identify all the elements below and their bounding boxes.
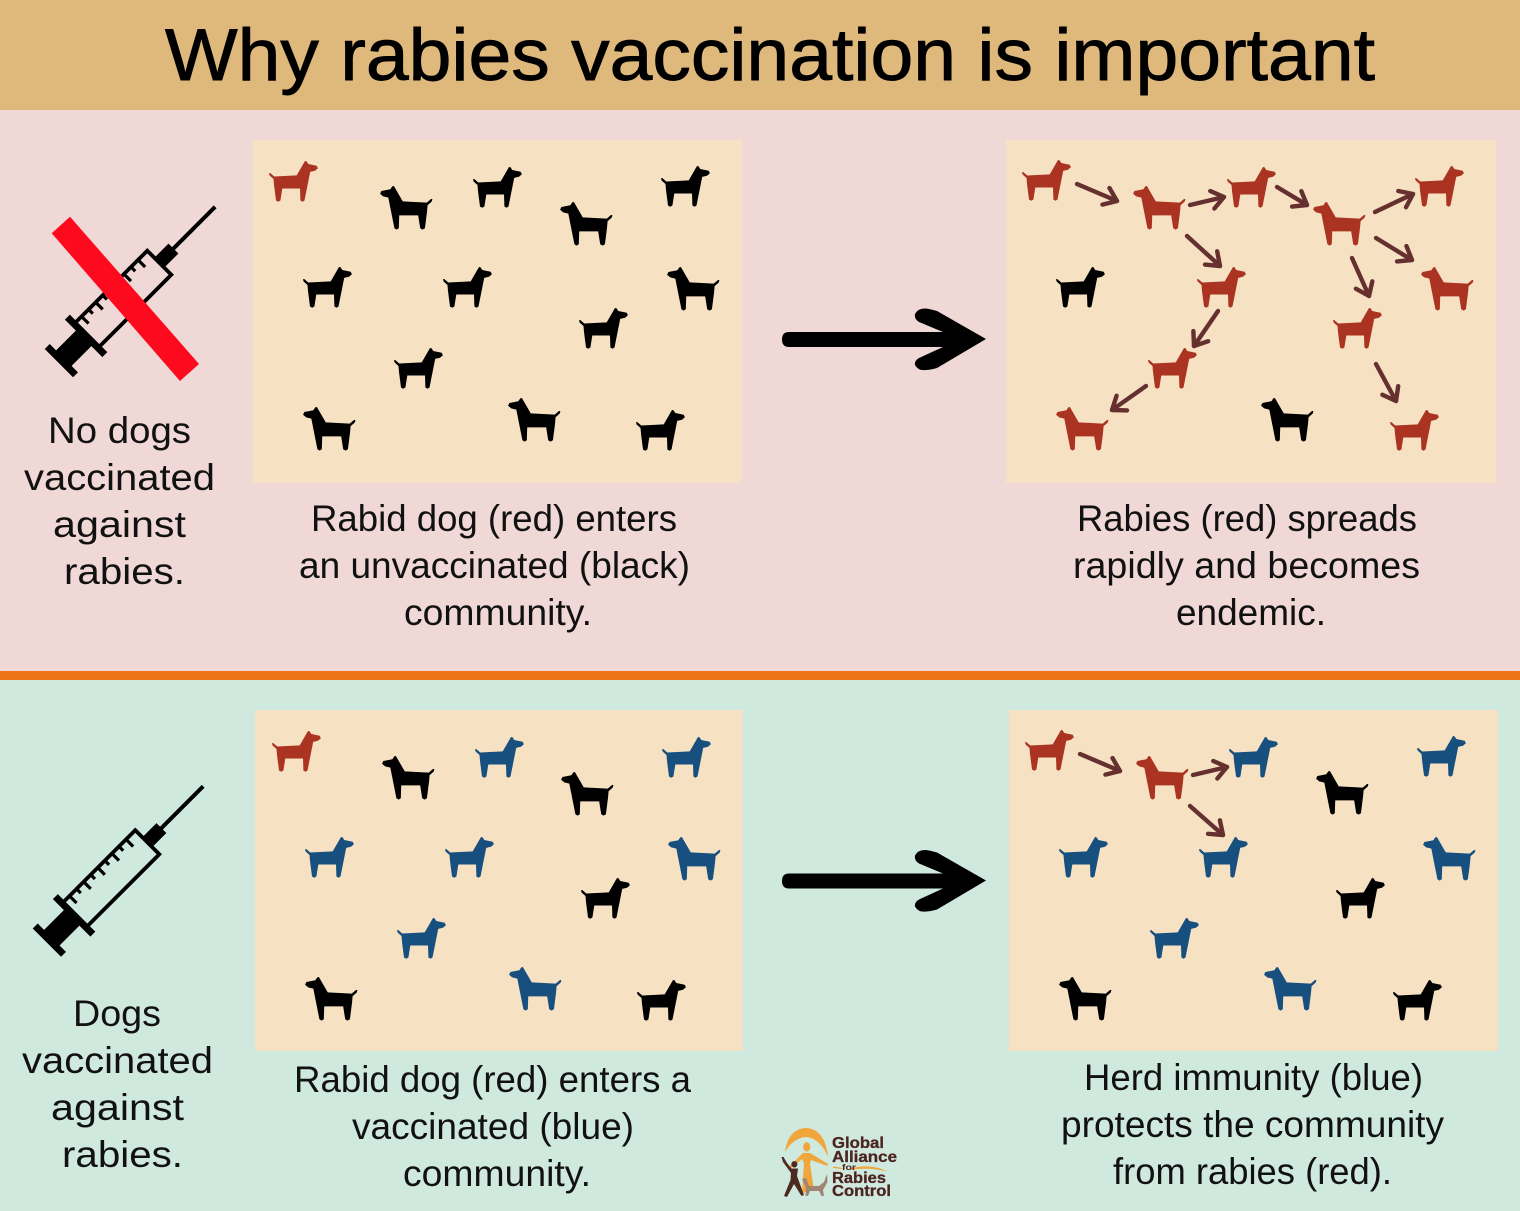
- panel: vaccination: [0, 680, 1520, 1211]
- unvaccinated dogs: [1059, 771, 1442, 1021]
- caption: rabid dog enters unvaccinated community: community.: [404, 592, 592, 633]
- infected dogs: [1022, 160, 1473, 451]
- logo crescent: [785, 1128, 828, 1157]
- label: dogs vaccinated: [22, 993, 213, 1175]
- scene: rabid dog enters vaccinated community: [255, 710, 743, 1051]
- logo text: [832, 1135, 897, 1200]
- label: dogs vaccinated: Dogs: [73, 993, 161, 1034]
- caption: rabid dog enters vaccinated community: community.: [403, 1153, 591, 1194]
- logo text: for: [842, 1163, 856, 1172]
- label: no dogs vaccinated: rabies.: [64, 551, 185, 592]
- infected dogs: [1025, 730, 1188, 800]
- caption: rabies spreads: rapidly and becomes: [1073, 545, 1420, 586]
- caption: rabies spreads: [1073, 498, 1420, 633]
- uninfected dogs: [1056, 267, 1313, 442]
- logo text: Alliance: [832, 1149, 897, 1166]
- panel: no vaccination: [0, 110, 1520, 671]
- rabid dog: [269, 161, 318, 202]
- caption: rabid dog enters unvaccinated community: an unvaccinated (black): [299, 545, 690, 586]
- unvaccinated dogs: [303, 166, 719, 451]
- vaccinated dogs: [305, 737, 720, 1011]
- caption: rabid dog enters unvaccinated community: Rabid dog (red) enters: [311, 498, 677, 539]
- logo text: Global: [832, 1135, 884, 1152]
- label: dogs vaccinated: rabies.: [62, 1134, 183, 1175]
- arrow: leads to herd immunity: [782, 850, 986, 912]
- label: no dogs vaccinated: [24, 410, 215, 592]
- label: dogs vaccinated: against: [51, 1087, 185, 1128]
- spread arrows: [1080, 754, 1227, 835]
- caption: rabid dog enters unvaccinated community: [299, 498, 690, 633]
- logo figure: dog: [802, 1174, 828, 1196]
- icon: crossed-out syringe: [40, 188, 234, 382]
- caption: rabid dog enters vaccinated community: Rabid dog (red) enters a: [294, 1059, 691, 1100]
- divider band: [0, 671, 1520, 680]
- scene: herd immunity: [1009, 710, 1498, 1051]
- caption: rabid dog enters vaccinated community: vaccinated (blue): [352, 1106, 634, 1147]
- rabid dog: [272, 731, 321, 772]
- vaccinated dogs: [1059, 736, 1475, 1011]
- caption: rabid dog enters vaccinated community: [294, 1059, 691, 1194]
- logo: Global Alliance for Rabies Control: [782, 1128, 897, 1200]
- arrow: leads to spread: [782, 308, 986, 370]
- title: Why rabies vaccination is important: [165, 15, 1375, 96]
- label: no dogs vaccinated: vaccinated: [24, 457, 215, 498]
- caption: herd immunity: [1061, 1057, 1445, 1192]
- unvaccinated dogs: [305, 756, 686, 1021]
- caption: herd immunity: protects the community: [1061, 1104, 1445, 1145]
- label: no dogs vaccinated: No dogs: [48, 410, 191, 451]
- spread arrows: [1077, 184, 1413, 410]
- label: dogs vaccinated: vaccinated: [22, 1040, 213, 1081]
- logo text: Rabies: [832, 1170, 886, 1187]
- scene: rabies spreads: [1006, 140, 1496, 483]
- caption: rabies spreads: Rabies (red) spreads: [1077, 498, 1417, 539]
- label: no dogs vaccinated: against: [53, 504, 187, 545]
- header band: [0, 0, 1520, 110]
- logo figure: child: [782, 1157, 804, 1197]
- icon: syringe: [28, 768, 222, 961]
- caption: herd immunity: from rabies (red).: [1113, 1151, 1392, 1192]
- logo swoosh: [833, 1166, 888, 1172]
- logo text: Control: [832, 1183, 891, 1200]
- logo figure: woman: [789, 1142, 828, 1193]
- caption: rabies spreads: endemic.: [1176, 592, 1326, 633]
- caption: herd immunity: Herd immunity (blue): [1084, 1057, 1423, 1098]
- scene: rabid dog enters unvaccinated community: [253, 140, 742, 483]
